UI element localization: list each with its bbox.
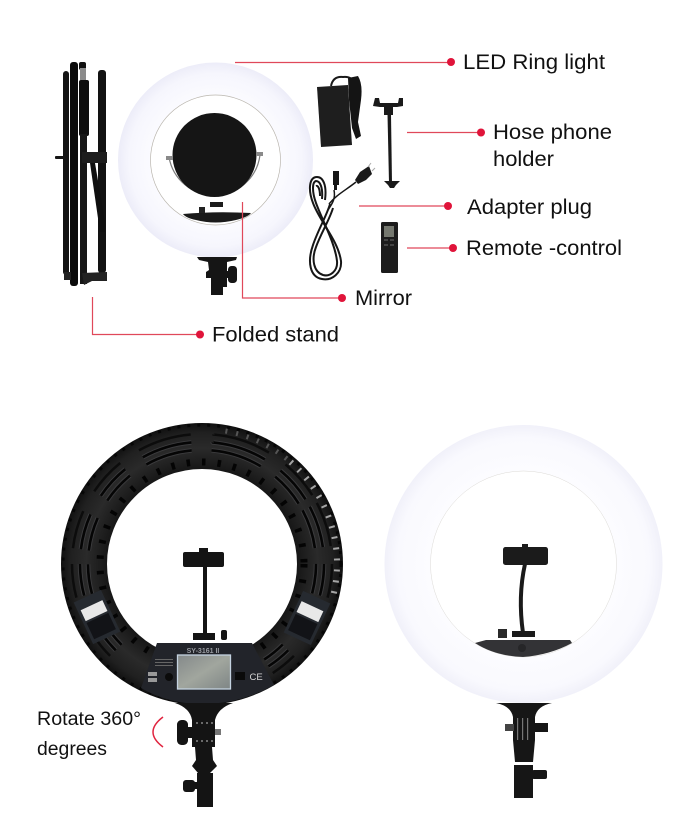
front view ring light: [408, 448, 640, 798]
control panel: [141, 643, 274, 704]
rotate note: [37, 709, 163, 760]
ring base plate: [183, 212, 251, 222]
control panel: SY-3161 II: [187, 648, 219, 655]
back phone holder: [183, 548, 227, 640]
callout: Folded stand: [92, 297, 339, 346]
callout: Adapter plug: [359, 196, 592, 219]
remote control: [381, 222, 398, 273]
back label left: [74, 590, 120, 644]
icon: rotation arc: [153, 717, 163, 747]
back label right: [284, 591, 330, 645]
callout: Adapter plug: Adapter plug: [467, 196, 592, 219]
mirror: [166, 113, 263, 207]
callout: LED Ring light: [235, 51, 605, 74]
back view ring light: [61, 423, 343, 807]
callout: Mirror: Mirror: [355, 287, 412, 310]
callout: LED Ring light: LED Ring light: [463, 51, 605, 74]
control panel: CE: [250, 672, 263, 683]
callout: Folded stand: Folded stand: [212, 324, 339, 346]
callout: Remote -control: Remote -control: [466, 237, 622, 260]
callout: Hose phone holder: holder: [493, 148, 554, 171]
callout: Hose phone holder: [407, 121, 612, 171]
callout: Hose phone holder: Hose phone: [493, 121, 612, 144]
phone holder: [373, 98, 403, 188]
front base plate: [475, 640, 572, 657]
rotate note: degrees: [37, 739, 107, 760]
back ring body: [61, 423, 343, 705]
power adapter: [317, 76, 362, 147]
front phone holder: [503, 544, 548, 637]
callout: Remote -control: [407, 237, 622, 260]
folded stand: [55, 62, 107, 286]
ring mount: [197, 257, 237, 295]
top LED ring light: [134, 78, 297, 295]
callout: Mirror: [242, 202, 412, 310]
front mount: [496, 703, 552, 798]
rotate note: Rotate 360°: [37, 709, 141, 730]
back mount: [175, 703, 233, 807]
power cable: [310, 163, 375, 279]
